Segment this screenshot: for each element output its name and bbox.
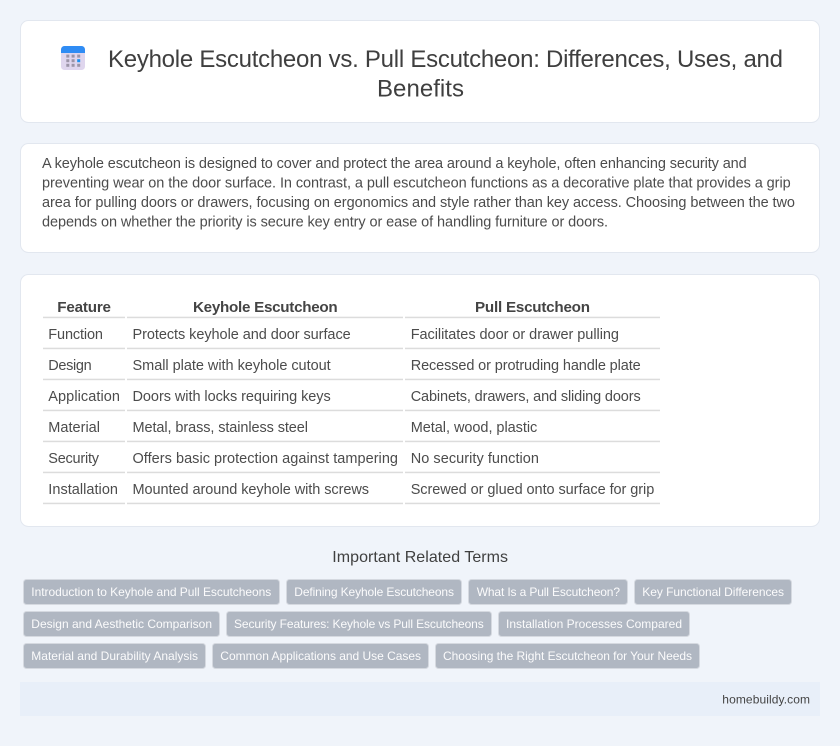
tag: security features	[226, 612, 492, 636]
title: Keyhole Escutcheon vs. Pull Escutcheon: Differences, Uses, and	[108, 46, 783, 73]
heading: related terms: Important Related Terms	[332, 549, 508, 566]
row: application: Doors with locks requiring keys	[132, 389, 331, 405]
tag: choosing the right: Choosing the Right Escutcheon for Your Needs	[443, 649, 692, 663]
summary text: A keyhole escutcheon is designed to cover and protect the area around a keyhole, often enhancing security and	[42, 156, 747, 172]
summary text	[42, 156, 795, 230]
table header row: Pull Escutcheon	[475, 299, 590, 316]
row: application: Cabinets, drawers, and sliding doors	[411, 389, 641, 405]
tag: common applications: Common Applications and Use Cases	[220, 649, 421, 663]
row: function: Facilitates door or drawer pulling	[411, 327, 619, 343]
title: Benefits	[377, 76, 464, 102]
row: application: Application	[48, 389, 120, 405]
table header row: Feature	[57, 299, 111, 316]
tag: key functional differences	[634, 580, 792, 604]
row: function: Function	[48, 327, 103, 343]
footer	[20, 682, 820, 716]
row: design: Small plate with keyhole cutout	[132, 358, 331, 374]
summary text: depends on whether the priority is secure key entry or ease of handling furniture or doors.	[42, 214, 608, 230]
summary text: preventing wear on the door surface. In contrast, a pull escutcheon functions as a decorative plate that provides a grip	[42, 176, 791, 192]
icon: calendar	[61, 46, 85, 70]
row: installation: Screwed or glued onto surface for grip	[411, 482, 654, 498]
tag: design and aesthetic	[24, 612, 220, 636]
tag: defining keyhole: Defining Keyhole Escutcheons	[294, 585, 454, 599]
tag: material and durability	[24, 644, 206, 668]
tag: what is a pull: What Is a Pull Escutcheon?	[477, 585, 620, 599]
panel: summary paragraph	[20, 144, 820, 252]
row: material: Metal, brass, stainless steel	[132, 420, 308, 436]
row: design: Recessed or protruding handle plate	[411, 358, 641, 374]
tag: introduction	[24, 580, 280, 604]
row: installation: Mounted around keyhole with screws	[132, 482, 369, 498]
row: security: Security	[48, 451, 100, 467]
tag: design and aesthetic: Design and Aesthetic Comparison	[31, 617, 212, 631]
row: security: No security function	[411, 451, 539, 467]
panel: comparison table	[20, 274, 820, 526]
tag: choosing the right	[436, 644, 700, 668]
row: security	[48, 451, 539, 467]
row: function	[48, 327, 619, 343]
table row rules	[43, 317, 660, 504]
row: design	[48, 358, 641, 374]
row: installation	[48, 482, 654, 498]
tag: material and durability: Material and Durability Analysis	[31, 649, 198, 663]
tag: installation processes: Installation Processes Compared	[506, 617, 682, 631]
row: security: Offers basic protection against tampering	[132, 451, 398, 467]
tag: security features: Security Features: Keyhole vs Pull Escutcheons	[234, 617, 484, 631]
panel: title header	[20, 20, 820, 122]
table header row: Keyhole Escutcheon	[193, 299, 338, 316]
row: design: Design	[48, 358, 92, 374]
tag: introduction: Introduction to Keyhole and Pull Escutcheons	[31, 585, 271, 599]
row: material	[48, 420, 537, 436]
tag: installation processes	[498, 612, 690, 636]
related term tags	[24, 580, 792, 668]
tag: common applications	[212, 644, 428, 668]
row: installation: Installation	[48, 482, 118, 498]
footer source text: homebuildy.com	[722, 692, 810, 706]
tag: what is a pull	[468, 580, 628, 604]
tag: defining keyhole	[286, 580, 462, 604]
summary text: area for pulling doors or drawers, focusing on ergonomics and style rather than key access. Choosing between the two	[42, 195, 795, 211]
row: application	[48, 389, 641, 405]
row: material: Material	[48, 420, 100, 436]
table header row	[57, 299, 590, 316]
row: function: Protects keyhole and door surface	[132, 327, 351, 343]
tag: key functional differences: Key Functional Differences	[642, 585, 784, 599]
row: material: Metal, wood, plastic	[411, 420, 537, 436]
title	[108, 46, 783, 102]
